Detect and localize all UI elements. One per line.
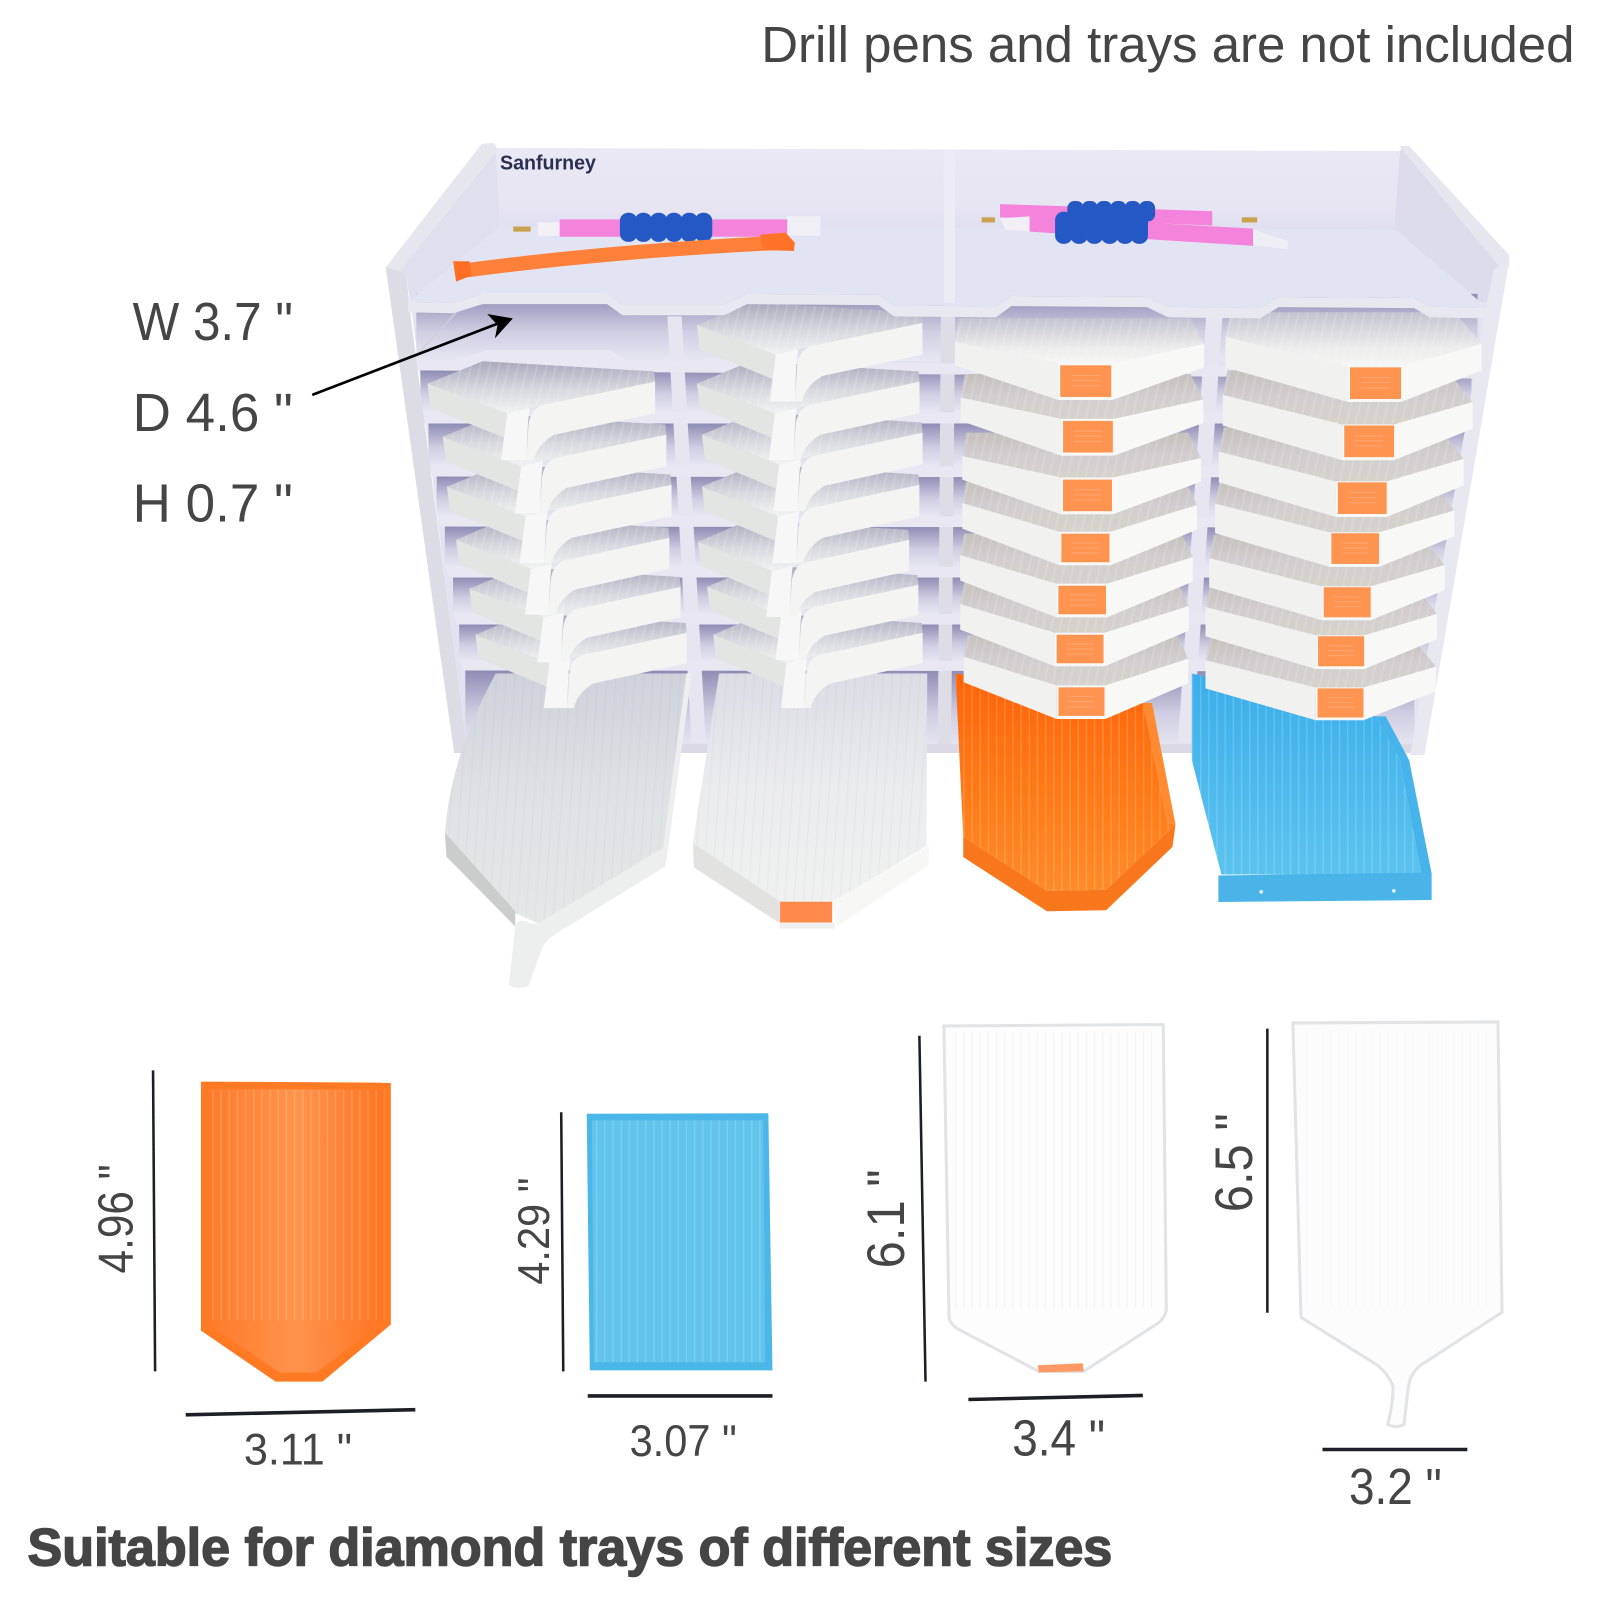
- organizer rack: [386, 143, 1509, 755]
- tray: orange pulled out: [956, 673, 1176, 911]
- rack shelves: [412, 350, 1480, 753]
- dimension line: blue height: [561, 1112, 563, 1371]
- dimension line: orange width: [186, 1410, 415, 1415]
- column 2: stacked spout trays: [697, 303, 923, 708]
- dimension line: orange height: [153, 1070, 155, 1371]
- tray sample: white with tab: [944, 1024, 1166, 1372]
- back wall: [496, 148, 1400, 233]
- label: 3.07 width: 3.07 ": [630, 1415, 737, 1466]
- heading: drill pens note: Drill pens and trays are not included: [761, 16, 1574, 73]
- brand label: Sanfurney: [500, 152, 597, 174]
- label: 3.11 width: 3.11 ": [244, 1423, 352, 1474]
- rack cavity: [410, 298, 1488, 751]
- left panel top edge: [386, 143, 498, 273]
- right side panel: [1394, 146, 1509, 318]
- drill pen: right lower pink: [982, 212, 1288, 249]
- label: 6.5 height: 6.5 ": [1205, 1113, 1264, 1212]
- label: 3.2 width: 3.2 ": [1349, 1458, 1442, 1515]
- slot side edge: [413, 311, 457, 359]
- tray: white with orange tab pulled out: [693, 673, 929, 929]
- tray: grey spout pulled out: [445, 673, 692, 988]
- label: 4.29 height: 4.29 ": [508, 1178, 559, 1285]
- dimension line: white tab width: [968, 1395, 1143, 1399]
- drill pen: right upper pink: [1000, 201, 1257, 226]
- slot backs: [416, 294, 1478, 748]
- tray sample: orange: [201, 1082, 391, 1382]
- height label: H 0.7 ": [133, 473, 293, 533]
- right panel top edge: [1399, 146, 1509, 267]
- left side panel: [386, 143, 500, 304]
- footer heading: Suitable for diamond trays of different sizes: [28, 1518, 1112, 1577]
- tray: blue pulled out: [1192, 673, 1432, 902]
- tray sample: white with spout: [1293, 1022, 1502, 1427]
- top shelf: [408, 151, 1487, 318]
- right front edge: [1410, 261, 1509, 755]
- dimension line: white spout height: [1266, 1029, 1269, 1313]
- dimension line: blue width: [588, 1394, 772, 1398]
- left front edge: [386, 267, 467, 753]
- label: 3.4 width: 3.4 ": [1012, 1410, 1105, 1467]
- dimension line: white tab height: [919, 1036, 926, 1382]
- arrow to slot: [312, 314, 513, 395]
- width label: W 3.7 ": [133, 292, 293, 352]
- dimension line: white spout width: [1322, 1448, 1467, 1451]
- column 1: stacked spout trays: [428, 361, 687, 708]
- depth label: D 4.6 ": [133, 383, 293, 443]
- column 4: stacked hexagonal trays: [1206, 312, 1482, 720]
- dimensions: slot size: [133, 292, 293, 533]
- center divider: [944, 151, 955, 303]
- label: 6.1 height: 6.1 ": [857, 1169, 916, 1268]
- drill pen: left pink: [513, 213, 820, 242]
- rack column dividers: [667, 316, 1222, 750]
- label: 4.96 height: 4.96 ": [90, 1164, 144, 1273]
- tray sample: blue: [587, 1113, 772, 1370]
- drill pen: orange: [453, 233, 795, 282]
- column 3: stacked hexagonal trays: [955, 318, 1204, 719]
